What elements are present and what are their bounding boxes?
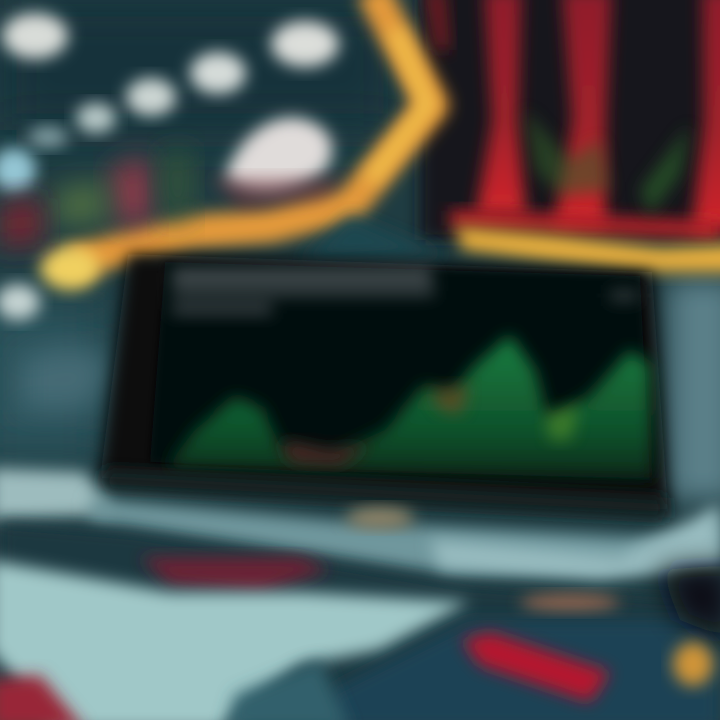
paper left strip [0, 468, 115, 520]
dark band [0, 522, 700, 720]
desk: lower papers [0, 468, 720, 720]
teal lower smudge [225, 660, 350, 720]
right pale strip [430, 505, 720, 580]
red sliver left [425, 0, 450, 50]
area chart [170, 335, 652, 478]
red column 1 [476, 0, 526, 215]
tablet lower edge [100, 470, 668, 518]
green streaks [525, 110, 610, 195]
red column 2 [554, 0, 612, 225]
bubbles: white chart dots [0, 13, 339, 320]
red label [462, 632, 610, 702]
large pale paper [0, 560, 470, 720]
panel: colored left blocks [0, 150, 345, 410]
tablet body [100, 254, 668, 510]
red stripe [140, 557, 330, 592]
orange dot [673, 642, 713, 686]
red base band [450, 210, 720, 238]
lower teal device [320, 620, 720, 720]
red corner [0, 675, 85, 720]
chart red accents [280, 440, 370, 465]
screen heading text blur [172, 270, 638, 314]
red column 3 [692, 0, 720, 230]
cloud: large white blob [225, 117, 332, 191]
panel: dark upper right with red columns [420, 0, 720, 240]
tan smudge [346, 507, 414, 529]
tablet: dark screen with chart [100, 215, 668, 518]
band: yellow horizontal stripe [455, 226, 720, 272]
arrow: yellow angular line [40, 0, 432, 290]
paper strip centre [90, 498, 720, 575]
yellow glow blob [40, 246, 100, 290]
tablet screen [150, 262, 650, 480]
tan smudge right [520, 593, 620, 613]
dark right corner [660, 565, 720, 640]
